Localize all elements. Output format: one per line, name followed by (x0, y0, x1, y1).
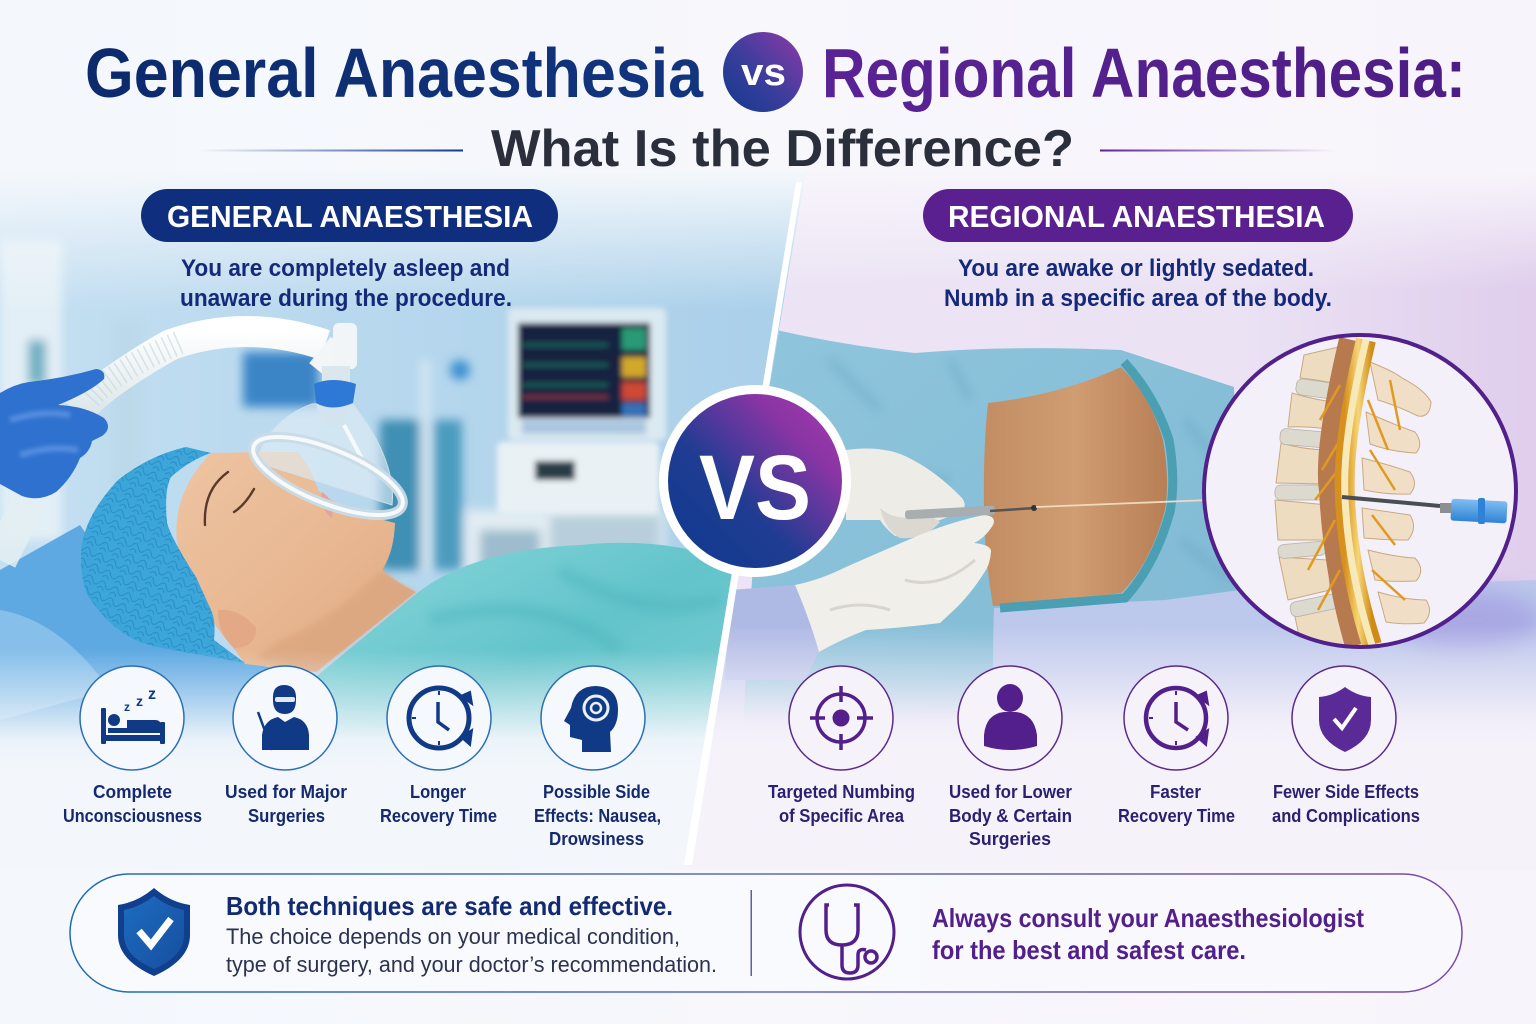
callout text: safety: type of surgery, and your doctor’s recommendation. (226, 952, 717, 977)
gloved hands (795, 448, 994, 652)
vs badge large (659, 385, 851, 577)
icon: stethoscope (800, 885, 894, 979)
surgeon sleeve (725, 585, 819, 680)
centre divider (684, 182, 802, 865)
feature: complete unconsciousness (63, 666, 202, 826)
blue gown (744, 330, 1237, 710)
spinal needle (1342, 497, 1440, 506)
gloved hand (0, 369, 108, 498)
vertebrae (1274, 346, 1344, 644)
vs badge large: VS (699, 437, 811, 539)
feature: major surgeries (225, 666, 347, 826)
pillow (0, 525, 270, 737)
callout text: safety: The choice depends on your medical condition, (226, 924, 680, 949)
feature: major surgeries: Used for Major (225, 781, 347, 802)
title: vs (741, 52, 786, 94)
callout text: consult: Always consult your Anaesthesiologist (932, 903, 1364, 933)
face and neck (176, 452, 416, 672)
feature: complete unconsciousness: z (148, 686, 156, 703)
feature: lower body: Body & Certain (949, 805, 1072, 826)
needle (905, 500, 1210, 519)
description: general: You are completely asleep and (181, 255, 510, 282)
heading pill: general: GENERAL ANAESTHESIA (167, 199, 533, 234)
callout text: safety (226, 891, 717, 977)
feature: complete unconsciousness: Complete (93, 781, 172, 802)
closed eye and brow (205, 472, 254, 525)
fade overlays (0, 170, 806, 294)
feature: fewer side effects: Fewer Side Effects (1273, 781, 1419, 802)
anaesthesia mask (248, 380, 408, 520)
feature: targeted numbing: Targeted Numbing (768, 781, 915, 802)
gown inner edge (1000, 362, 1173, 608)
description: regional: Numb in a specific area of the body. (944, 285, 1332, 312)
nerve roots (1331, 340, 1358, 645)
feature: complete unconsciousness: z (136, 693, 143, 709)
mask tube (0, 323, 357, 560)
callout text: consult: for the best and safest care. (932, 935, 1246, 965)
blurred hospital background (0, 240, 665, 600)
surgical cap (81, 447, 245, 663)
panel: regional anaesthesia photo (680, 170, 1536, 870)
feature: faster recovery: Recovery Time (1118, 805, 1235, 826)
description: general (180, 255, 512, 312)
feature: side effects (534, 666, 661, 849)
feature: longer recovery (380, 666, 497, 826)
description: regional: You are awake or lightly sedated. (958, 255, 1314, 282)
feature: major surgeries: Surgeries (248, 805, 325, 826)
bottom callout (70, 874, 1462, 992)
fade overlays (796, 170, 1536, 264)
feature: lower body: Surgeries (969, 828, 1051, 849)
feature: lower body: Used for Lower (949, 781, 1072, 802)
description: general: unaware during the procedure. (180, 285, 512, 312)
feature: complete unconsciousness: Unconsciousness (63, 805, 202, 826)
heading pill: regional (923, 189, 1353, 242)
feature: targeted numbing: of Specific Area (779, 805, 905, 826)
heading pill: general (141, 189, 558, 242)
icon: safety shield (118, 888, 190, 976)
lips under the mask (320, 492, 333, 518)
callout text: consult (932, 903, 1364, 965)
teal drape (317, 542, 732, 736)
title (85, 32, 1466, 112)
feature: side effects: Effects: Nausea, (534, 805, 661, 826)
feature: side effects: Drowsiness (549, 828, 644, 849)
inset: spine illustration (1204, 335, 1516, 650)
description: regional (944, 255, 1332, 312)
feature: lower body (949, 666, 1072, 849)
ear (218, 610, 256, 648)
feature: faster recovery: Faster (1150, 781, 1201, 802)
feature: fewer side effects: and Complications (1272, 805, 1420, 826)
feature: longer recovery: Longer (410, 781, 466, 802)
callout text: safety: Both techniques are safe and effective. (226, 891, 673, 921)
feature: fewer side effects (1272, 666, 1420, 826)
subtitle: What Is the Difference? (491, 120, 1074, 178)
feature: faster recovery (1118, 666, 1235, 826)
spinal cord (1345, 340, 1372, 645)
patient monitor (497, 308, 666, 514)
title: General Anaesthesia (85, 34, 704, 112)
lower sheet (718, 580, 1536, 708)
feature: side effects: Possible Side (543, 781, 650, 802)
exposed back (984, 367, 1167, 606)
feature: complete unconsciousness: z (124, 700, 130, 714)
feature: longer recovery: Recovery Time (380, 805, 497, 826)
spinous processes (1362, 362, 1431, 624)
heading pill: regional: REGIONAL ANAESTHESIA (948, 199, 1325, 234)
panel: general anaesthesia photo (0, 170, 810, 870)
discs (1275, 378, 1341, 618)
feature: targeted numbing (768, 666, 915, 826)
